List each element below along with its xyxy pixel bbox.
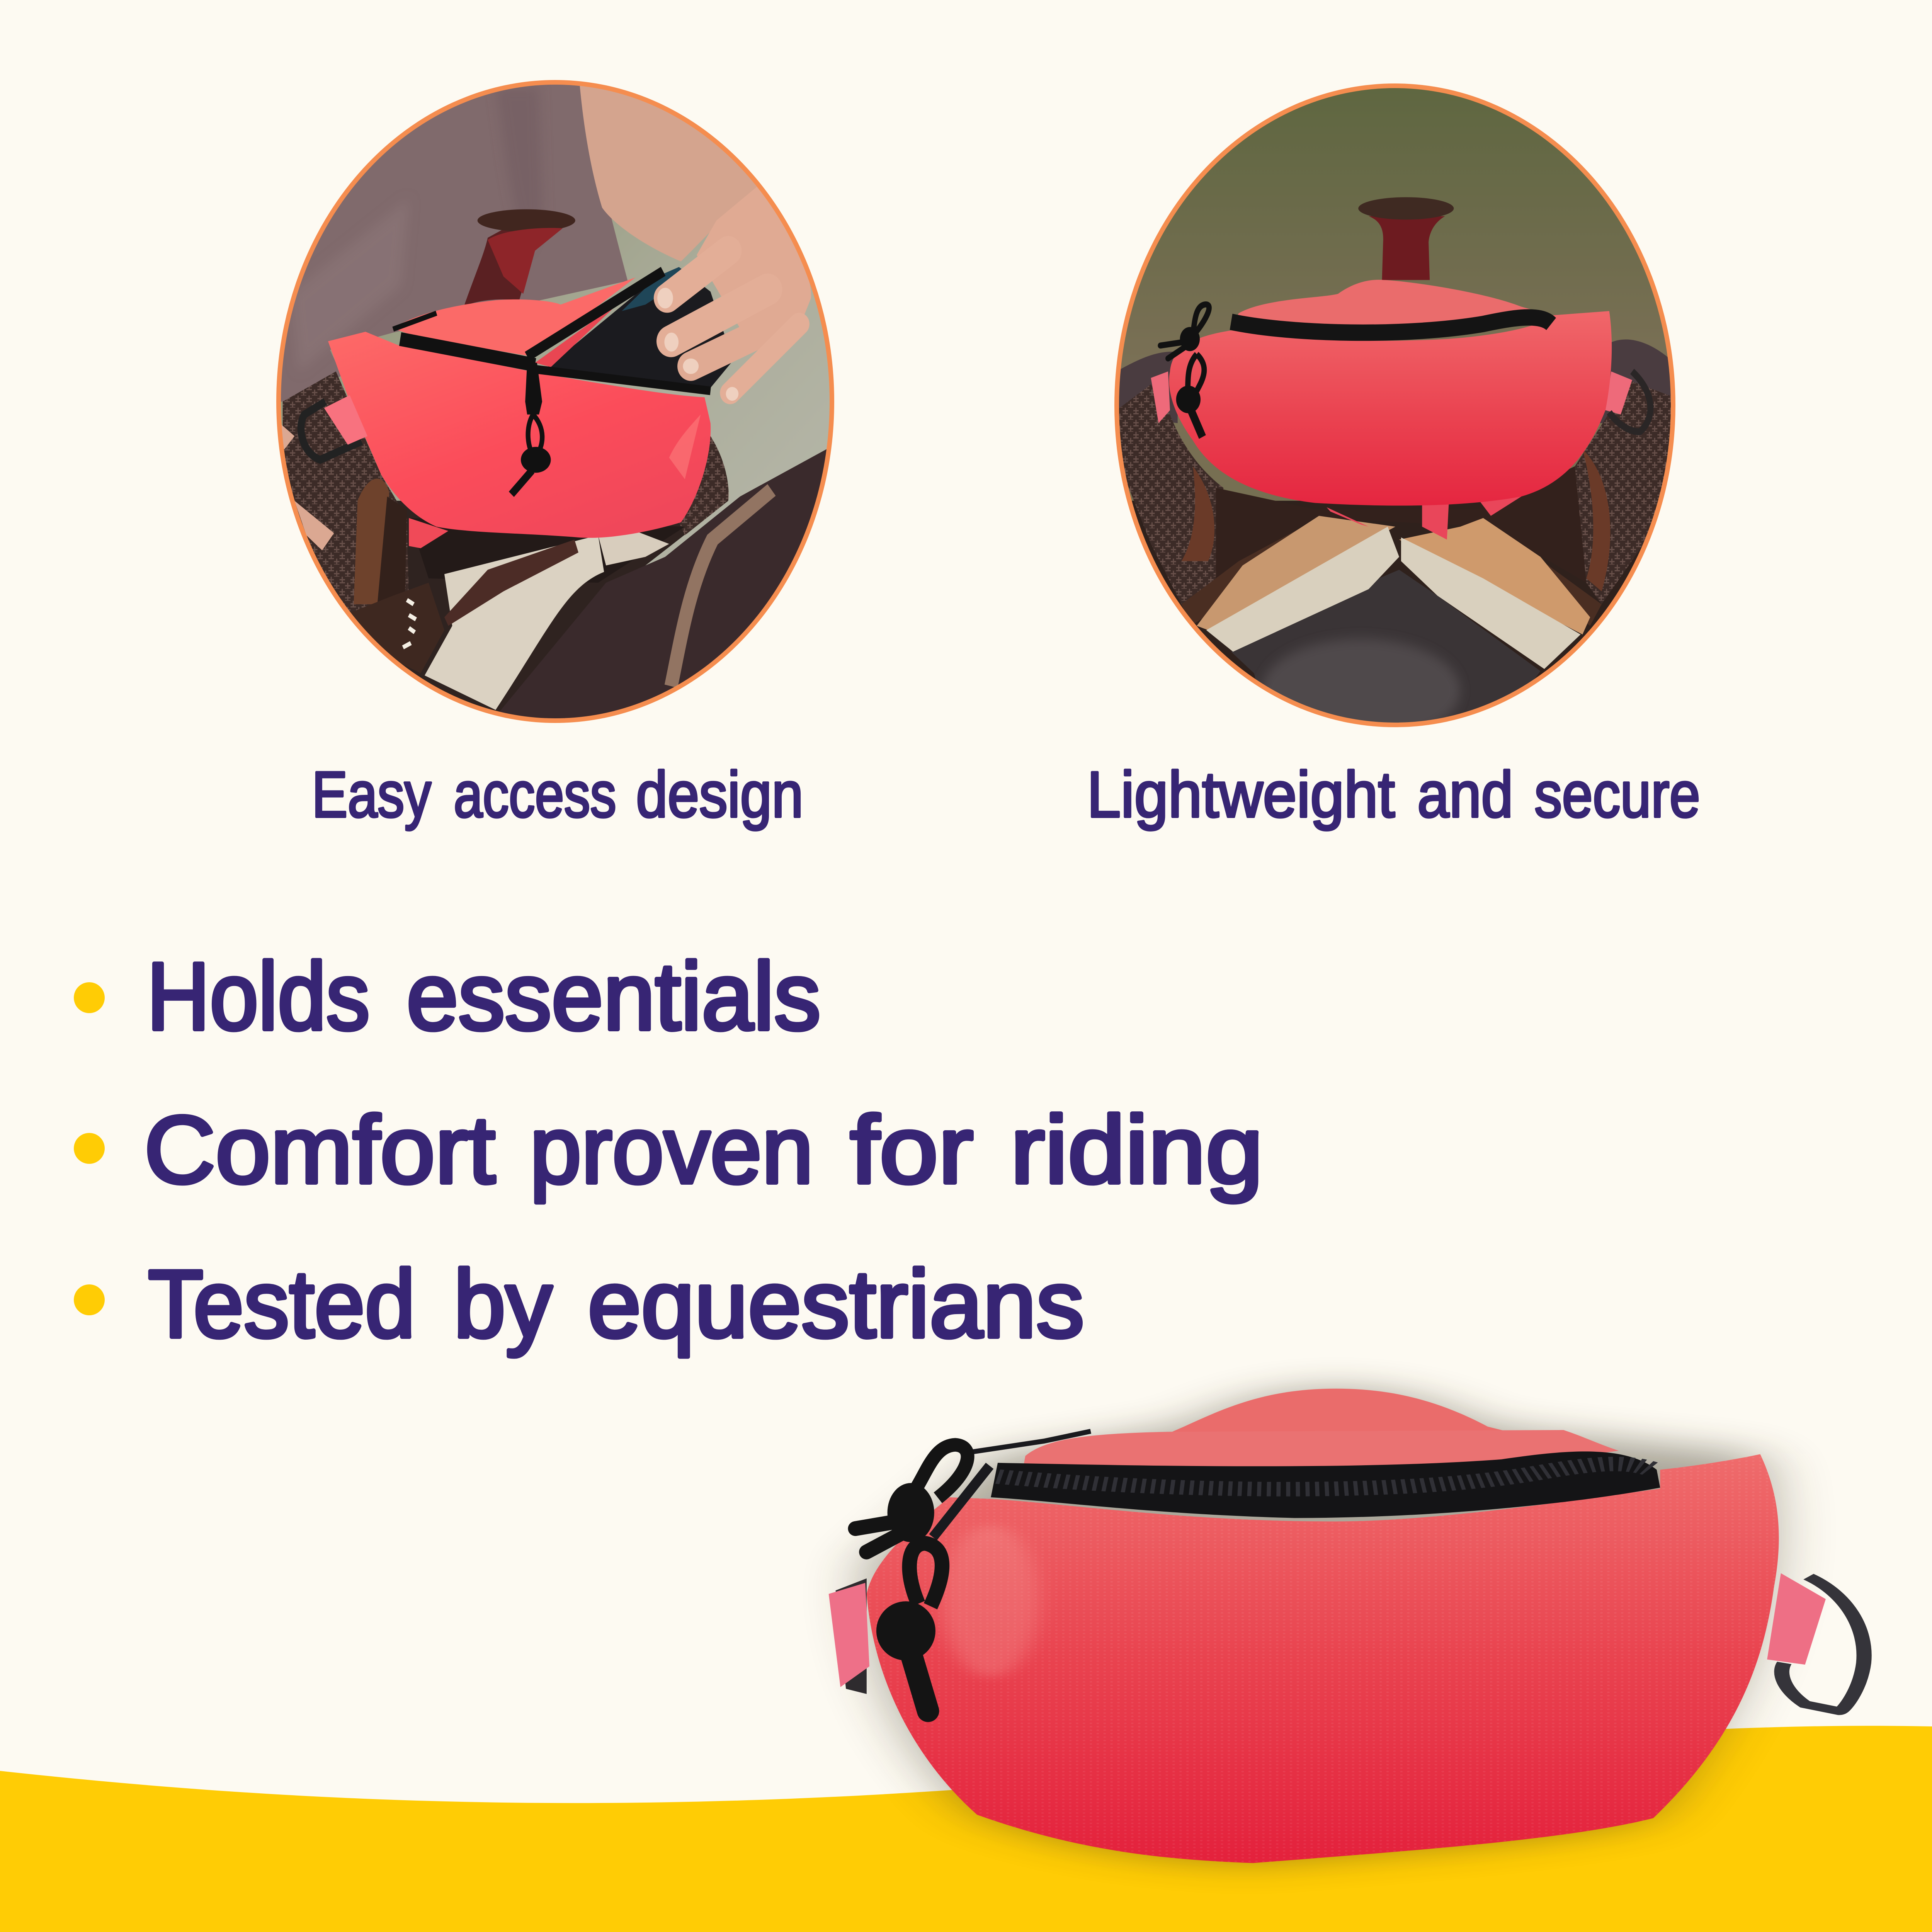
bullet dot 2 xyxy=(74,1133,105,1164)
caption: lightweight and secure: and xyxy=(1417,758,1513,831)
caption: lightweight and secure: secure xyxy=(1534,758,1700,831)
caption: easy access design: Easy xyxy=(312,758,431,831)
caption: easy access design: design xyxy=(636,758,803,831)
bullet dot 1 xyxy=(74,982,105,1013)
bullet text: tested by equestrians: equestrians xyxy=(588,1250,1084,1357)
zipper xyxy=(991,1451,1660,1518)
bullet dot 3 xyxy=(74,1284,105,1315)
bullet text: tested by equestrians: Tested xyxy=(148,1250,415,1357)
saddle horn xyxy=(1358,197,1454,280)
caption: easy access design: access xyxy=(454,758,616,831)
bullet text: holds essentials: essentials xyxy=(406,942,821,1050)
bullet text: comfort proven for riding: riding xyxy=(1010,1096,1263,1203)
hand xyxy=(657,186,811,401)
product photo: waist bag xyxy=(829,1389,1864,1863)
saddle horn xyxy=(464,209,575,306)
photo: easy access circle xyxy=(251,70,869,746)
cord and zipper pull xyxy=(855,1431,1091,1711)
bag body xyxy=(867,1454,1779,1863)
bullet text: holds essentials: Holds xyxy=(147,942,370,1050)
caption: lightweight and secure: Lightweight xyxy=(1087,758,1395,831)
yellow wave footer xyxy=(0,1726,1932,1932)
bullet text: comfort proven for riding: proven xyxy=(530,1096,813,1203)
bullet text: tested by equestrians: by xyxy=(454,1250,552,1357)
bullet text: comfort proven for riding: for xyxy=(850,1096,973,1203)
bag xyxy=(328,271,711,538)
bullet text: comfort proven for riding: Comfort xyxy=(144,1096,495,1203)
photo: lightweight and secure circle xyxy=(1101,70,1700,746)
bag xyxy=(1151,280,1650,539)
